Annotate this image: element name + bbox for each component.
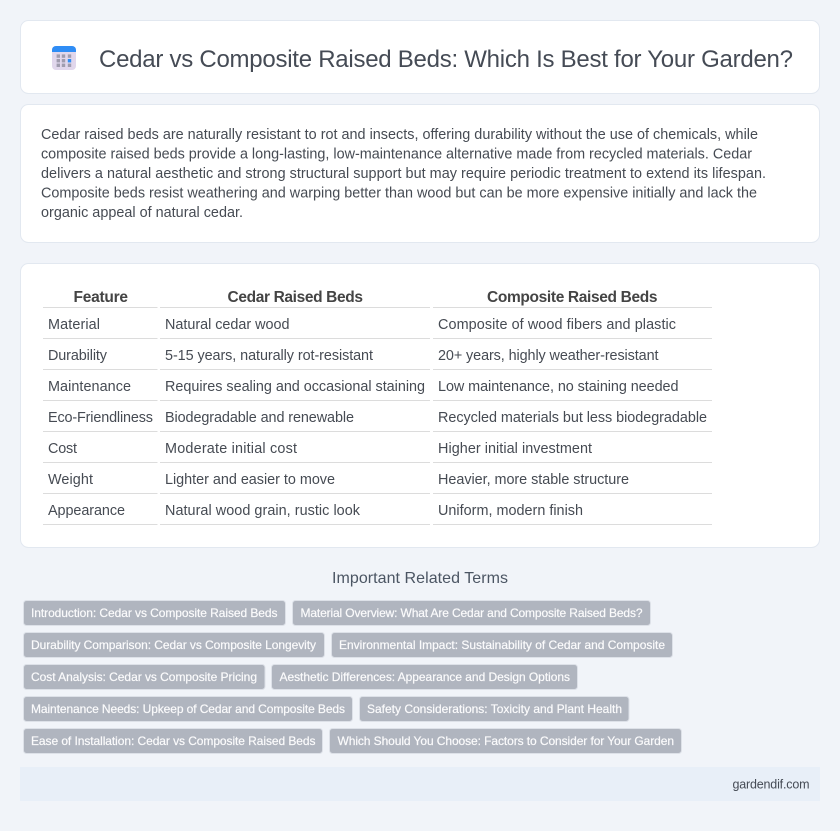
row: appearance: Appearance bbox=[48, 503, 125, 519]
tag: Maintenance Needs: Upkeep of Cedar and Composite Beds bbox=[31, 702, 345, 716]
tag: Durability Comparison: Cedar vs Composite Longevity bbox=[31, 638, 316, 652]
tag: Aesthetic Differences: Appearance and Design Options bbox=[280, 670, 570, 684]
panel: introduction text: Cedar raised beds are naturally resistant to rot and insects, offering durability without the use of chemicals, while bbox=[41, 127, 758, 143]
row: durability bbox=[48, 348, 658, 364]
tag bbox=[24, 728, 322, 754]
row: durability: Durability bbox=[48, 348, 108, 364]
footer source: gardendif.com bbox=[732, 778, 810, 792]
tag bbox=[332, 632, 672, 658]
panel: comparison table bbox=[20, 264, 820, 548]
tag bbox=[24, 632, 324, 658]
panel: introduction text: composite raised beds provide a long-lasting, low-maintenance alternative made from recycled materials. Cedar bbox=[41, 146, 752, 162]
icon: calendar bbox=[52, 46, 76, 70]
tag: Cost Analysis: Cedar vs Composite Pricing bbox=[31, 670, 257, 684]
row: material: Natural cedar wood bbox=[165, 317, 290, 333]
row: weight: Lighter and easier to move bbox=[165, 472, 335, 488]
tag bbox=[24, 696, 352, 722]
tag bbox=[330, 728, 682, 754]
title: Cedar vs Composite Raised Beds: Which Is Best for Your Garden? bbox=[99, 46, 793, 73]
row: maintenance bbox=[48, 379, 678, 395]
footer bar bbox=[20, 767, 820, 801]
table header: Composite Raised Beds bbox=[487, 289, 658, 306]
row: weight: Weight bbox=[48, 472, 93, 488]
tag: Introduction: Cedar vs Composite Raised Beds bbox=[31, 606, 278, 620]
tag bbox=[292, 600, 650, 626]
tag bbox=[24, 600, 286, 626]
table header: Feature bbox=[74, 289, 128, 306]
heading: important related terms: Important Related Terms bbox=[332, 570, 508, 587]
row: eco-friendliness: Biodegradable and renewable bbox=[165, 410, 354, 426]
tag bbox=[272, 664, 578, 690]
row: maintenance: Low maintenance, no staining needed bbox=[438, 379, 678, 395]
panel: introduction text: Composite beds resist weathering and warping better than wood but can be more expensive initially and lack the bbox=[41, 186, 757, 202]
tag: Safety Considerations: Toxicity and Plant Health bbox=[367, 702, 622, 716]
row: durability: 20+ years, highly weather-resistant bbox=[438, 348, 658, 364]
row: appearance: Uniform, modern finish bbox=[438, 503, 583, 519]
panel: introduction text: organic appeal of natural cedar. bbox=[41, 205, 243, 221]
row: appearance bbox=[48, 503, 583, 519]
table header bbox=[74, 289, 658, 306]
row: eco-friendliness: Eco-Friendliness bbox=[48, 410, 153, 426]
row: cost: Higher initial investment bbox=[438, 441, 592, 457]
tag: Material Overview: What Are Cedar and Composite Raised Beds? bbox=[300, 606, 643, 620]
row: eco-friendliness bbox=[48, 410, 707, 426]
row: weight bbox=[48, 472, 629, 488]
row: cost: Cost bbox=[48, 441, 77, 457]
row: cost bbox=[48, 441, 592, 457]
row: material: Material bbox=[48, 317, 100, 333]
row: durability: 5-15 years, naturally rot-resistant bbox=[165, 348, 373, 364]
panel: introduction text: delivers a natural aesthetic and strong structural support but may require periodic treatment to extend its lifespan. bbox=[41, 166, 766, 182]
row: eco-friendliness: Recycled materials but less biodegradable bbox=[438, 410, 707, 426]
row: appearance: Natural wood grain, rustic look bbox=[165, 503, 361, 519]
tag bbox=[24, 664, 265, 690]
tag: Ease of Installation: Cedar vs Composite Raised Beds bbox=[31, 734, 316, 748]
row: maintenance: Requires sealing and occasional staining bbox=[165, 379, 425, 395]
row: material bbox=[48, 317, 676, 333]
related term tags bbox=[24, 600, 682, 754]
tag: Which Should You Choose: Factors to Consider for Your Garden bbox=[338, 734, 674, 748]
row: maintenance: Maintenance bbox=[48, 379, 131, 395]
table header: Cedar Raised Beds bbox=[228, 289, 363, 306]
panel: introduction text bbox=[20, 104, 820, 242]
panel: title header bbox=[20, 20, 820, 94]
tag: Environmental Impact: Sustainability of Cedar and Composite bbox=[339, 638, 665, 652]
row: weight: Heavier, more stable structure bbox=[438, 472, 629, 488]
tag bbox=[360, 696, 629, 722]
row: material: Composite of wood fibers and plastic bbox=[438, 317, 676, 333]
row: cost: Moderate initial cost bbox=[165, 441, 297, 457]
